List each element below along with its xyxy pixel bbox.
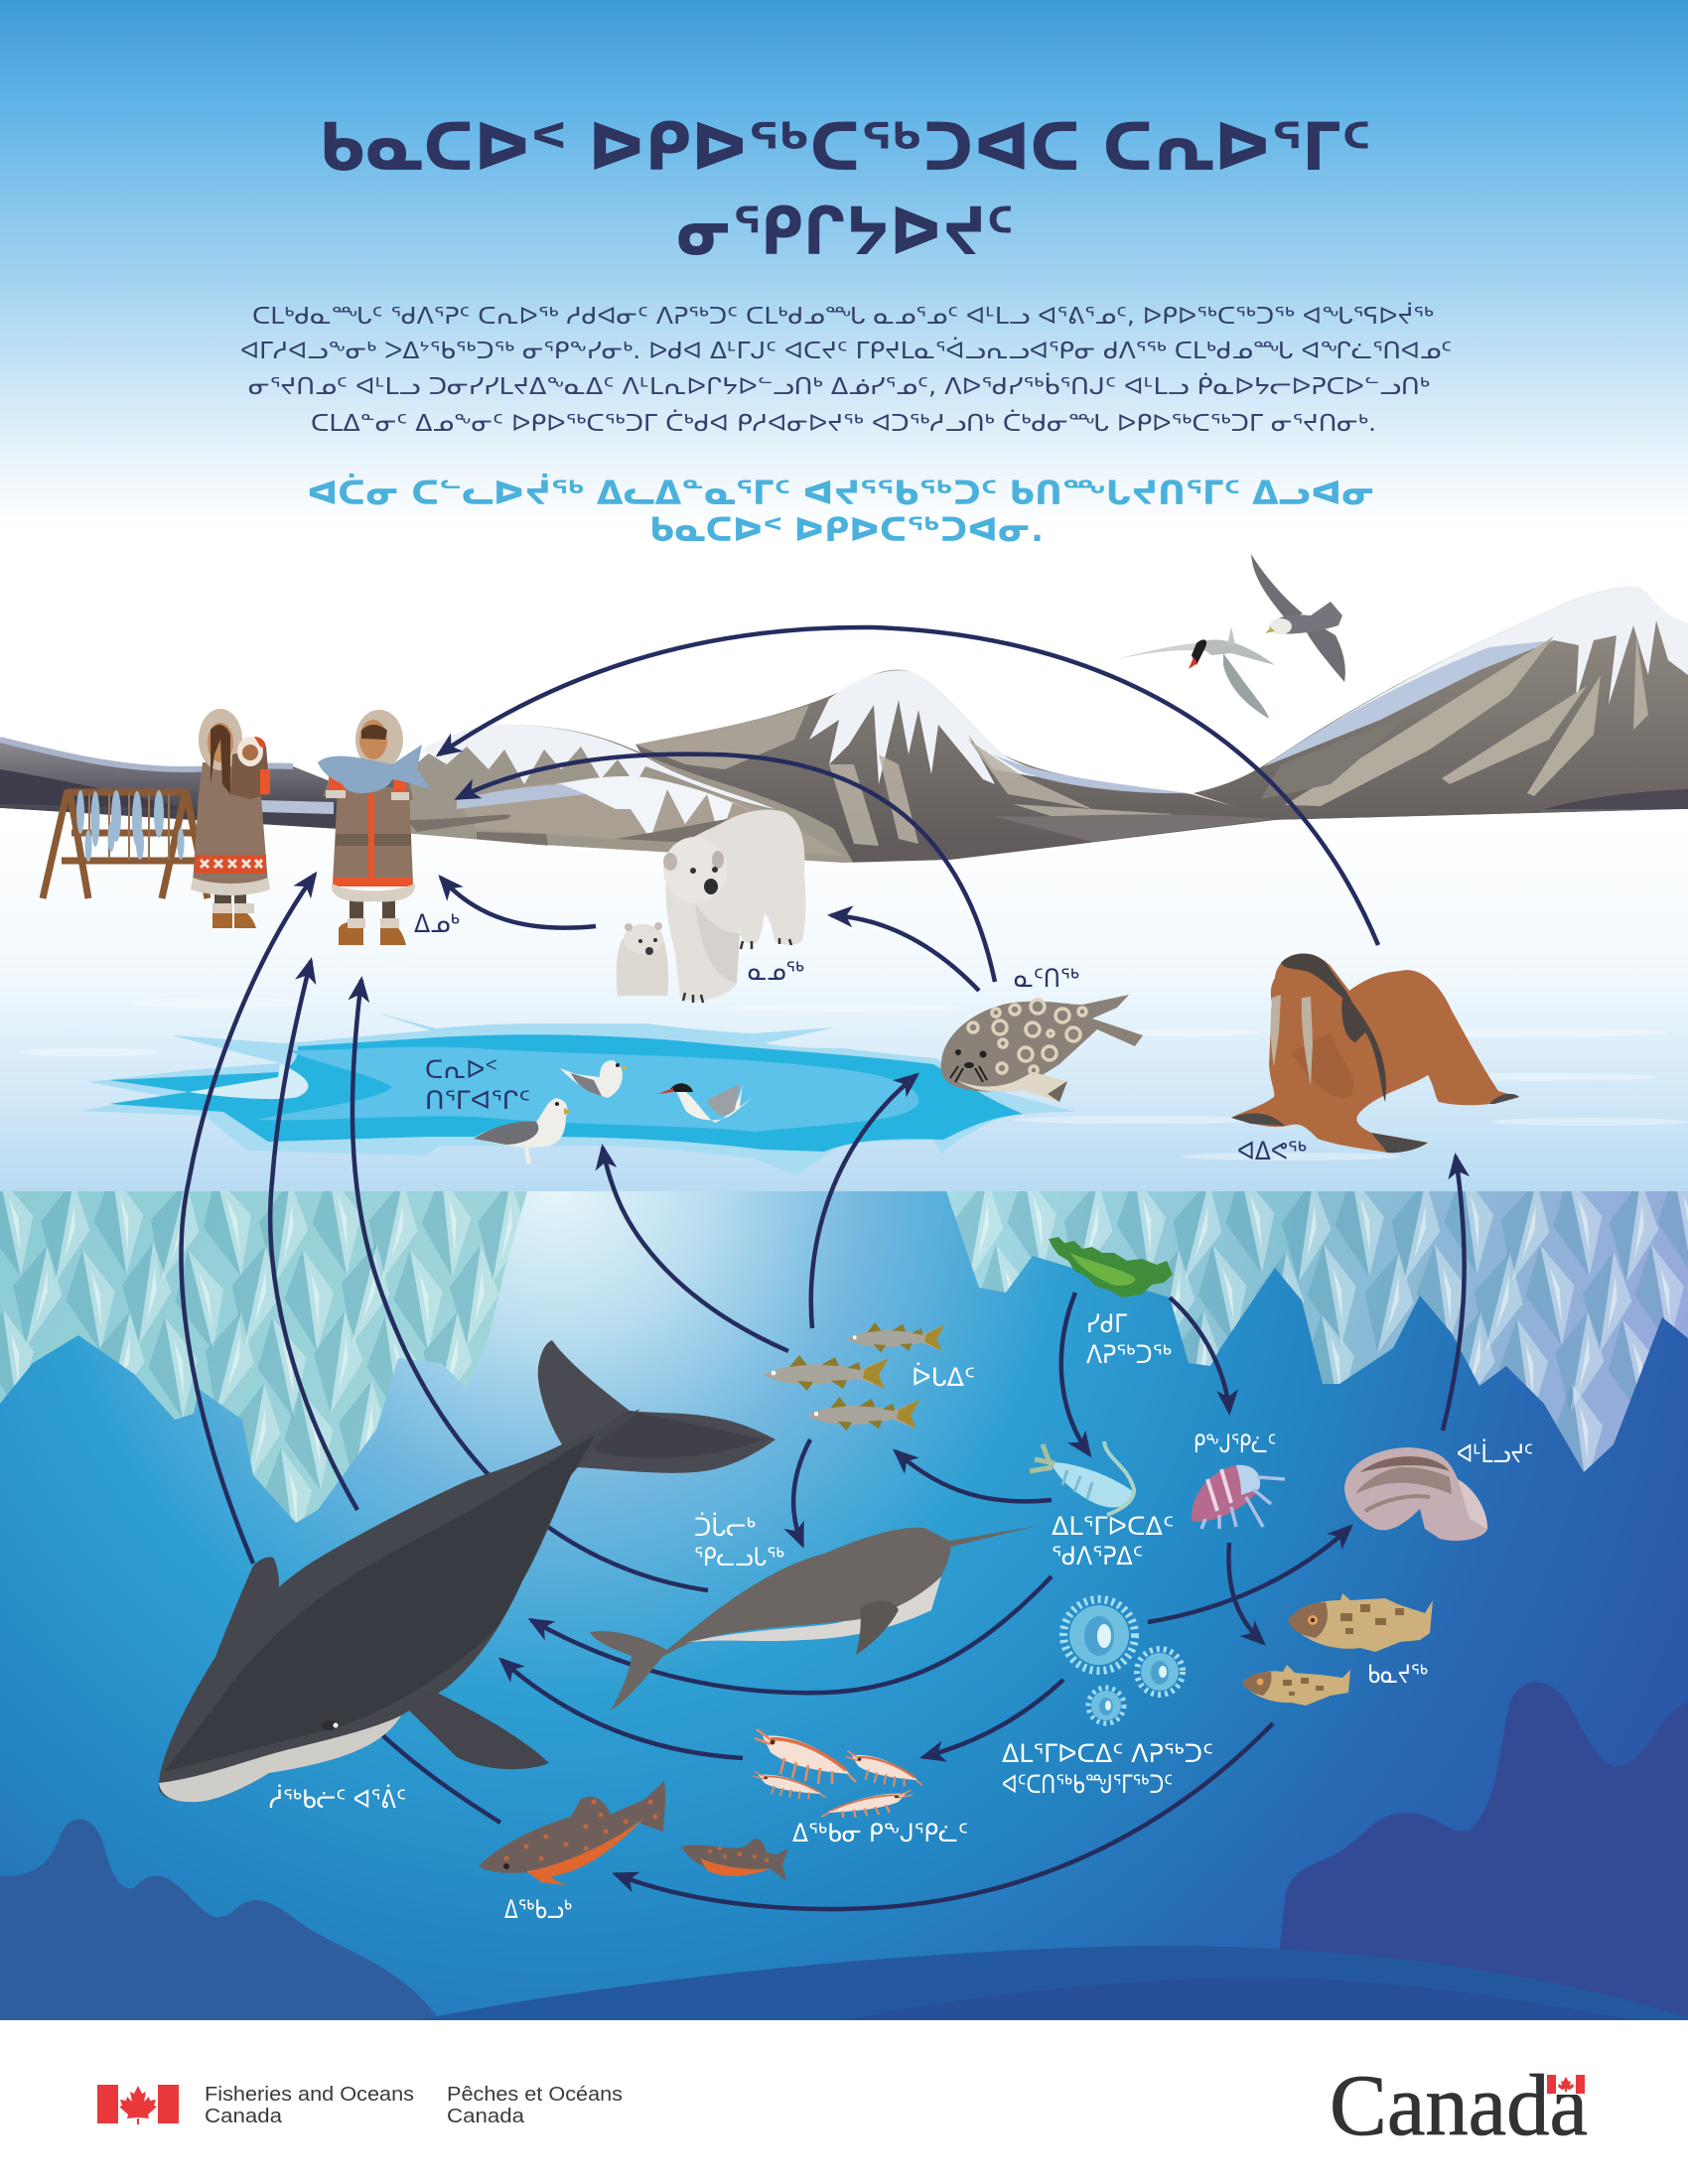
label: phytoplankton: ᐃᒪᕐᒥᐅᑕᐃᑦ ᐱᕈᖅᑐᑦ (1002, 1739, 1213, 1768)
title: ᓂᕐᑭᒋᔭᐅᔪᑦ (676, 194, 1014, 270)
seafloor hills (0, 1682, 1688, 2020)
logo: Canada wordmark: Canada (1330, 2058, 1588, 2154)
label: narwhal: ᕿᓚᓗᒐᖅ (694, 1543, 784, 1571)
mountains (0, 588, 1688, 864)
label: seabirds: ᑎᕐᒥᐊᕐᒋᑦ (425, 1086, 530, 1115)
label: sculpin: ᑲᓇᔪᖅ (1367, 1660, 1428, 1689)
label: seabirds: ᑕᕆᐅᑉ (425, 1055, 497, 1084)
icon: ringed seal (941, 995, 1143, 1102)
subtitle: ᐊᑖᓂ ᑕᓪᓚᐅᔫᖅ ᐃᓚᐃᓐᓇᕐᒥᑦ ᐊᔪᕐᖃᖅᑐᑦ ᑲᑎᙵᔪᑎᕐᒥᑦ ᐃᓗᐊᓂ (307, 474, 1375, 512)
text block: introduction: ᐊᒥᓱᐊᓗᖕᓂᒃ ᐳᐃᔾᖃᖅᑐᖅ ᓂᕿᖕᓯᓂᒃ. ᐅᑯᐊ ᐃᒻᒥᒍᑦ ᐊᑕᔪᑦ ᒥᑭᔪᒪᓇᕐᐋᓗᕆᓗᐊᕿᓂ ᑯᐱᕐᖅ ᑕᒪᒃᑯᓄᙵ ᐊᖏᓛᕐᑎᐊᓄᑦ (240, 338, 1452, 364)
icon: bowhead whale (159, 1340, 775, 1802)
text block: department name English (205, 2084, 414, 2127)
label: seabirds (425, 1055, 530, 1115)
subtitle: ᑲᓇᑕᐅᑉ ᐅᑭᐅᑕᖅᑐᐊᓂ. (649, 510, 1044, 549)
icon: arctic cod (764, 1322, 944, 1431)
label: ice algae: ᓯᑯᒥ (1086, 1309, 1127, 1338)
text block: department name English: Fisheries and Oceans (205, 2084, 414, 2106)
text block: department name French (447, 2084, 623, 2127)
icon: arctic tern on water (657, 1082, 754, 1123)
background: ocean (0, 1191, 1688, 2020)
label: amphipods: ᑭᖕᒍᕿᓛᑦ (1194, 1430, 1276, 1458)
text block: introduction: ᑕᒪᐃᓐᓂᑦ ᐃᓄᖕᓂᑦ ᐅᑭᐅᖅᑕᖅᑐᒥ ᑖᒃᑯᐊ ᑭᓱᐊᓂᐅᔪᖅ ᐊᑐᖅᓱᓗᑎᒃ ᑖᒃᑯᓂᙵ ᐅᑭᐅᖅᑕᖅᑐᒥ ᓂᕐᔪᑎᓂᒃ. (311, 410, 1376, 437)
text block: introduction: ᓂᕐᔪᑎᓄᑦ ᐊᒻᒪᓗ ᑐᓂᓯᓯᒪᔪᐃᖕᓇᐃᑦ ᐱᒻᒪᕆᐅᒋᔭᐅᓪᓗᑎᒃ ᐃᓅᓯᕐᓄᑦ, ᐱᐅᖁᓯᖅᑳᕐᑎᒍᑦ ᐊᒻᒪᓗ ᑮᓇᐅᔭᓕᐅᕈᑕᐅᓪᓗᑎᒃ (248, 373, 1430, 400)
label: ice algae (1086, 1309, 1172, 1369)
text block: introduction: ᑕᒪᒃᑯᓇᙵᑦ ᖁᐱᕐᕈᑦ ᑕᕆᐅᖅ ᓱᑯᐊᓂᑦ ᐱᕈᖅᑐᑦ ᑕᒪᒃᑯᓄᙵ ᓇᓄᕐᓄᑦ ᐊᒻᒪᓗ ᐊᕐᕕᕐᓄᑦ, ᐅᑭᐅᖅᑕᖅᑐᖅ ᐊᖓᕐᕋᐅᔫᖅ (252, 303, 1434, 330)
title (319, 109, 1371, 270)
text block: department name English: Canada (205, 2106, 283, 2127)
label: walrus: ᐊᐃᕙᖅ (1237, 1137, 1307, 1165)
icon: flying arctic tern (1116, 626, 1275, 719)
label: zooplankton: ᖁᐱᕐᕈᐃᑦ (1052, 1542, 1143, 1570)
subtitle (307, 474, 1375, 549)
icon: walrus (1231, 953, 1519, 1153)
icon: amphipod (1192, 1465, 1285, 1529)
text block: introduction (240, 303, 1452, 437)
label: zooplankton (1052, 1512, 1174, 1570)
label: ringed seal: ᓇᑦᑎᖅ (1014, 964, 1079, 993)
text block: department name French: Pêches et Océans (447, 2084, 623, 2106)
icon: sculpin large (1288, 1593, 1433, 1652)
icon: ice algae (1049, 1237, 1173, 1297)
icon: phytoplankton (1063, 1599, 1183, 1723)
open water polynya (80, 1013, 1075, 1175)
icon: sculpin small (1242, 1665, 1350, 1706)
footer band (0, 2020, 1688, 2184)
icon: zooplankton copepod (1030, 1441, 1134, 1515)
arrows: food web links (182, 627, 1465, 1909)
icon: arctic char small (681, 1839, 788, 1881)
label: people: ᐃᓄᒃ (414, 909, 460, 938)
logo: Government of Canada flag signature (97, 2085, 179, 2124)
label: arctic char: ᐃᖅᑲᓗᒃ (504, 1895, 572, 1924)
icon: gull on water (474, 1098, 571, 1165)
icon: woman with child (191, 709, 270, 928)
label: bowhead whale: ᓲᖅᑲᓖᑦ ᐊᕐᕖᑦ (269, 1785, 406, 1814)
background: sky (0, 0, 1688, 854)
label: phytoplankton: ᐊᑦᑕᑎᖅᑲᙳᕐᒥᖅᑐᑦ (1002, 1770, 1173, 1799)
icon: clam (1344, 1447, 1487, 1541)
label: polar bear: ᓇᓄᖅ (748, 957, 804, 986)
icon: polar bear (663, 810, 805, 1003)
text block: department name French: Canada (447, 2106, 525, 2127)
label: narwhal: ᑑᒑᓕᒃ (694, 1513, 756, 1542)
icon: flying fulmar (1251, 554, 1345, 682)
label: arctic cod: ᐆᒐᐃᑦ (912, 1363, 975, 1392)
icon: fish drying rack (43, 790, 208, 898)
label: phytoplankton (1002, 1739, 1213, 1799)
label: krill: ᐃᖅᑲᓂ ᑭᖕᒍᕿᓛᑦ (792, 1819, 968, 1847)
label: zooplankton: ᐃᒪᕐᒥᐅᑕᐃᑦ (1052, 1512, 1174, 1541)
icon: fulmar on water (560, 1060, 628, 1098)
icon: narwhal (590, 1526, 1038, 1710)
label: ice algae: ᐱᕈᖅᑐᖅ (1086, 1340, 1172, 1369)
iceberg underside left (0, 1191, 527, 1523)
icon: arctic char large (479, 1781, 665, 1885)
icon: man holding fish (318, 710, 431, 945)
title: ᑲᓇᑕᐅᑉ ᐅᑭᐅᖅᑕᖅᑐᐊᑕ ᑕᕆᐅᕐᒥᑦ (319, 109, 1371, 186)
icon: polar bear cub (617, 922, 668, 996)
label: clams: ᐊᒻᒫᓗᔪᑦ (1457, 1439, 1533, 1468)
icon: krill (753, 1729, 921, 1818)
ice surface streaks (20, 998, 1688, 1160)
background: sea ice (0, 808, 1688, 1191)
label: narwhal (694, 1513, 784, 1571)
iceberg underside right (946, 1191, 1688, 1472)
